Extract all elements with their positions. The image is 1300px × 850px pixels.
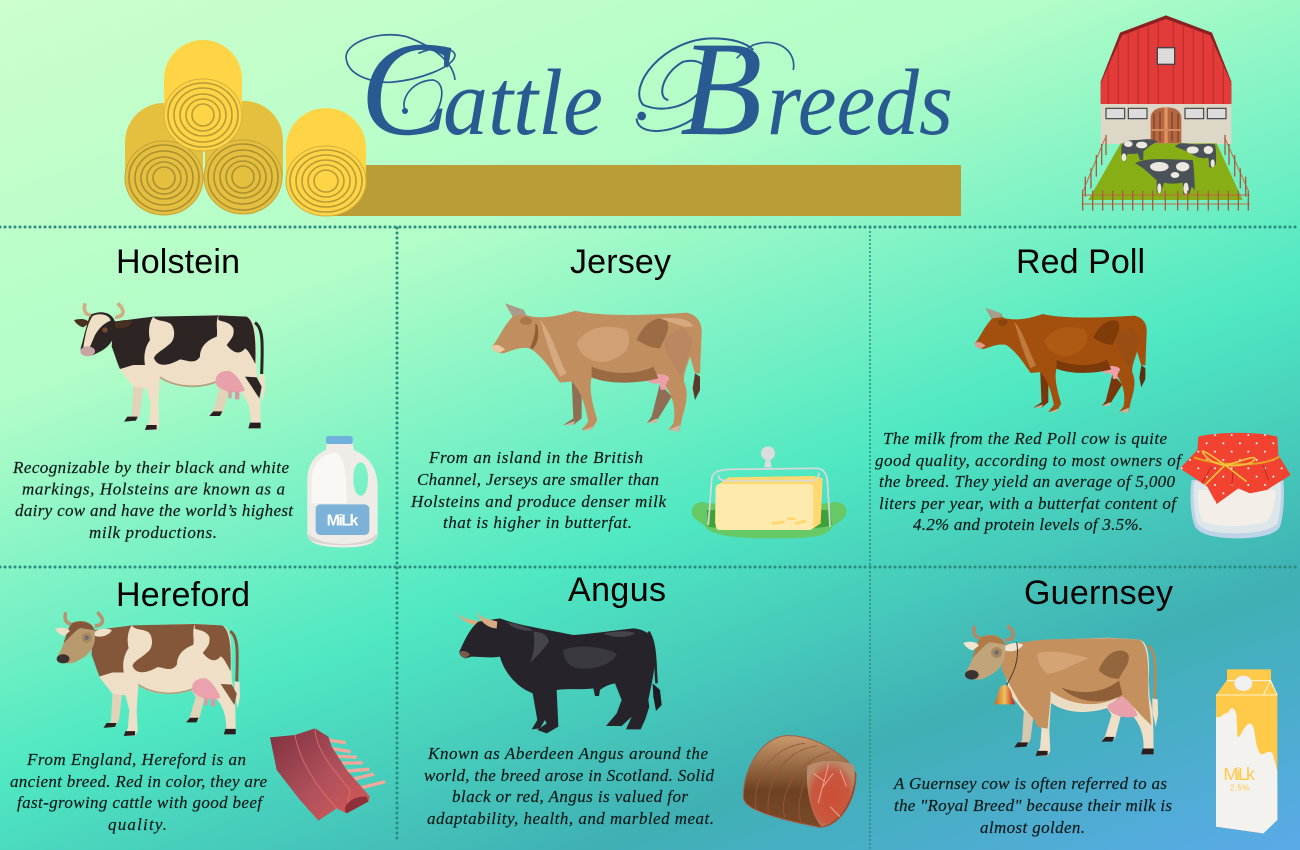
icon: milk carton: MiLk	[1223, 764, 1256, 784]
title: B	[680, 15, 762, 164]
text block: Hereford description: ancient breed. Red in color, they are	[10, 772, 267, 791]
text block: Angus description: Known as Aberdeen Angus around the	[427, 744, 708, 763]
icon: barn with cows	[1082, 15, 1250, 211]
panel: Jersey	[410, 243, 847, 538]
title: C	[360, 15, 452, 164]
icon: Jersey cow	[492, 303, 702, 432]
text block: Jersey description: Channel, Jerseys are smaller than	[417, 470, 659, 489]
text block: Red Poll description: the breed. They yield an average of 5,000	[879, 472, 1176, 491]
text block: Holstein description	[12, 458, 294, 542]
icon: right hay bale	[286, 108, 366, 216]
heading: Jersey: Jersey	[570, 243, 671, 281]
text block: Guernsey description	[893, 774, 1172, 837]
icon: milk carton: 2.5%	[1230, 784, 1249, 793]
text block: Hereford description	[10, 750, 267, 834]
icon: Guernsey cow with bell	[963, 626, 1158, 756]
icon: milk jug: MiLk	[327, 512, 358, 529]
text block: Angus description: world, the breed arose in Scotland. Solid	[424, 766, 714, 785]
heading: Angus: Angus	[568, 571, 666, 609]
text block: Red Poll description: good quality, according to most owners of	[875, 451, 1183, 470]
text block: Angus description	[424, 744, 714, 828]
panel: Hereford	[10, 576, 385, 834]
text block: Guernsey description: A Guernsey cow is often referred to as	[893, 774, 1167, 793]
icon: Angus bull	[454, 609, 662, 733]
text block: Angus description: adaptability, health, and marbled meat.	[427, 809, 714, 828]
icon: lower left hay bale	[125, 103, 203, 215]
icon: top hay bale	[164, 40, 242, 151]
heading: Guernsey: Guernsey	[1024, 574, 1173, 612]
panel: Angus	[424, 571, 856, 828]
text block: Jersey description: that is higher in butterfat.	[443, 513, 632, 532]
text block: Jersey description	[410, 448, 666, 532]
title: reeds	[767, 51, 953, 155]
text block: Holstein description: markings, Holsteins are known as a	[22, 480, 285, 498]
icon: milk carton	[1216, 669, 1277, 833]
heading: Red Poll: Red Poll	[1016, 243, 1145, 281]
text block: Jersey description: Holsteins and produce denser milk	[410, 492, 666, 511]
text block: Holstein description: Recognizable by their black and white	[12, 458, 289, 477]
text block: Hereford description: fast-growing cattle with good beef	[17, 793, 264, 812]
icon: milk jug	[307, 436, 378, 547]
text block: Holstein description: dairy cow and have the world’s highest	[15, 501, 294, 520]
gold bar	[330, 165, 961, 216]
panel: Holstein	[12, 243, 378, 547]
text block: Hereford description: quality.	[108, 815, 167, 834]
heading: Holstein: Holstein	[116, 243, 240, 281]
panel: Guernsey	[893, 574, 1277, 837]
icon: rack of ribs	[270, 728, 385, 821]
text block: Guernsey description: almost golden.	[980, 818, 1085, 837]
icon: jam jar	[1180, 433, 1291, 538]
text block: Red Poll description: The milk from the Red Poll cow is quite	[883, 429, 1167, 448]
header: hay bales and gold bar	[125, 40, 961, 216]
icon: beef roast	[743, 736, 856, 827]
icon: Holstein cow	[74, 303, 265, 430]
text block: Holstein description: milk productions.	[89, 523, 217, 542]
heading: Hereford: Hereford	[116, 576, 250, 614]
text block: Red Poll description: 4.2% and protein levels of 3.5%.	[913, 515, 1143, 534]
title	[346, 15, 953, 164]
text block: Red Poll description: liters per year, with a butterfat content of	[879, 494, 1178, 513]
icon: butter dish	[692, 446, 847, 538]
text block: Guernsey description: the "Royal Breed" because their milk is	[894, 796, 1172, 815]
icon: lower right hay bale	[204, 101, 283, 214]
text block: Hereford description: From England, Hereford is an	[26, 750, 246, 769]
dotted grid lines	[0, 227, 1300, 850]
text block: Jersey description: From an island in the British	[428, 448, 643, 467]
panel: Red Poll	[875, 243, 1291, 538]
text block: Red Poll description	[875, 429, 1183, 534]
text block: Angus description: black or red, Angus is valued for	[452, 787, 688, 806]
title: attle	[443, 51, 603, 155]
icon: Red Poll cow	[975, 308, 1147, 413]
icon: Hereford cow	[55, 612, 240, 736]
